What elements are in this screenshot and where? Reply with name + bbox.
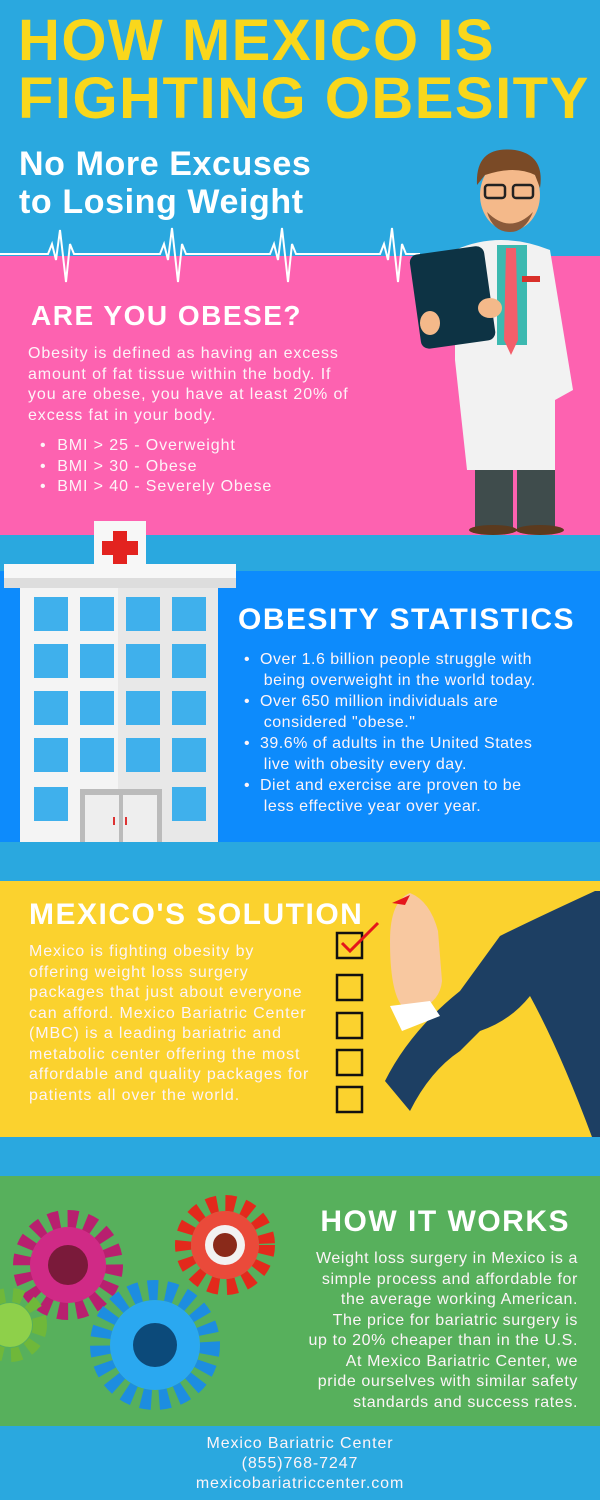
title: HOW MEXICO IS bbox=[18, 8, 495, 73]
icon: doctor bbox=[410, 150, 573, 535]
footer: contact: Mexico Bariatric Center bbox=[206, 1435, 393, 1452]
subtitle: to Losing Weight bbox=[19, 183, 304, 221]
text: how it works: At Mexico Bariatric Center, we bbox=[346, 1352, 578, 1370]
footer: contact: (855)768-7247 bbox=[242, 1455, 358, 1472]
list: BMI: • BMI > 25 - Overweight bbox=[40, 437, 236, 454]
list: BMI bbox=[40, 437, 272, 495]
subtitle: No More Excuses bbox=[19, 145, 311, 183]
list: statistics: • Diet and exercise are proven to be bbox=[244, 777, 522, 794]
text: how it works: simple process and affordable for bbox=[322, 1270, 578, 1288]
heading: obesity statistics: OBESITY STATISTICS bbox=[238, 603, 575, 636]
subtitle bbox=[19, 145, 311, 221]
heading: how it works: HOW IT WORKS bbox=[320, 1205, 570, 1238]
text: solution: Mexico is fighting obesity by bbox=[29, 943, 254, 960]
list: statistics: • 39.6% of adults in the United States bbox=[244, 735, 532, 752]
section: pink bbox=[0, 256, 600, 535]
text: how it works bbox=[309, 1250, 578, 1410]
text: solution: can afford. Mexico Bariatric Center bbox=[29, 1004, 307, 1022]
list: statistics: being overweight in the world today. bbox=[264, 672, 536, 689]
text: obesity definition: amount of fat tissue within the body. If bbox=[28, 366, 331, 382]
section: stats blue bbox=[0, 571, 600, 842]
panel: mexico's solution bbox=[29, 898, 363, 1104]
text: obesity definition: you are obese, you have at least 20% of bbox=[28, 386, 349, 403]
icon: gears bbox=[0, 1195, 275, 1410]
title: FIGHTING OBESITY bbox=[18, 66, 590, 131]
text: solution: affordable and quality packages for bbox=[29, 1066, 309, 1083]
list: statistics: considered "obese." bbox=[264, 714, 415, 731]
text: how it works: The price for bariatric surgery is bbox=[333, 1312, 578, 1328]
text: how it works: the average working American. bbox=[341, 1291, 578, 1308]
title bbox=[18, 8, 590, 131]
text: solution bbox=[29, 943, 309, 1104]
text: obesity definition: Obesity is defined as having an excess bbox=[28, 345, 339, 362]
text: how it works: standards and success rates. bbox=[353, 1394, 578, 1410]
section: green bbox=[0, 1176, 600, 1426]
panel: obesity statistics bbox=[238, 603, 575, 815]
text: solution: offering weight loss surgery bbox=[29, 964, 249, 980]
text: solution: packages that just about everyone bbox=[29, 984, 302, 1001]
list: statistics: • Over 650 million individuals are bbox=[244, 693, 498, 710]
panel: how it works bbox=[309, 1205, 578, 1410]
icon: checklist hand bbox=[336, 891, 600, 1137]
section: yellow bbox=[0, 881, 600, 1137]
text: how it works: pride ourselves with similar safety bbox=[318, 1373, 578, 1390]
panel: are you obese bbox=[28, 300, 349, 495]
text: obesity definition bbox=[28, 345, 349, 424]
heartbeat line bbox=[0, 228, 420, 282]
list: statistics: less effective year over year. bbox=[264, 798, 481, 815]
list: statistics: live with obesity every day. bbox=[264, 756, 467, 773]
list: BMI: • BMI > 30 - Obese bbox=[40, 458, 197, 474]
text: solution: metabolic center offering the most bbox=[29, 1046, 300, 1062]
footer: contact bbox=[196, 1435, 404, 1492]
list: BMI: • BMI > 40 - Severely Obese bbox=[40, 478, 272, 495]
icon: hospital bbox=[4, 521, 236, 842]
list: statistics: • Over 1.6 billion people struggle with bbox=[244, 651, 532, 668]
text: obesity definition: excess fat in your body. bbox=[28, 406, 216, 424]
footer: contact: mexicobariatriccenter.com bbox=[196, 1475, 404, 1492]
text: how it works: up to 20% cheaper than in the U.S. bbox=[309, 1332, 578, 1349]
text: solution: (MBC) is a leading bariatric and bbox=[29, 1025, 282, 1042]
list: statistics bbox=[244, 651, 536, 815]
text: how it works: Weight loss surgery in Mexico is a bbox=[316, 1250, 578, 1267]
heading: are you obese: ARE YOU OBESE? bbox=[31, 300, 302, 331]
text: solution: patients all over the world. bbox=[29, 1086, 240, 1104]
heading: mexico's solution: MEXICO'S SOLUTION bbox=[29, 898, 363, 931]
